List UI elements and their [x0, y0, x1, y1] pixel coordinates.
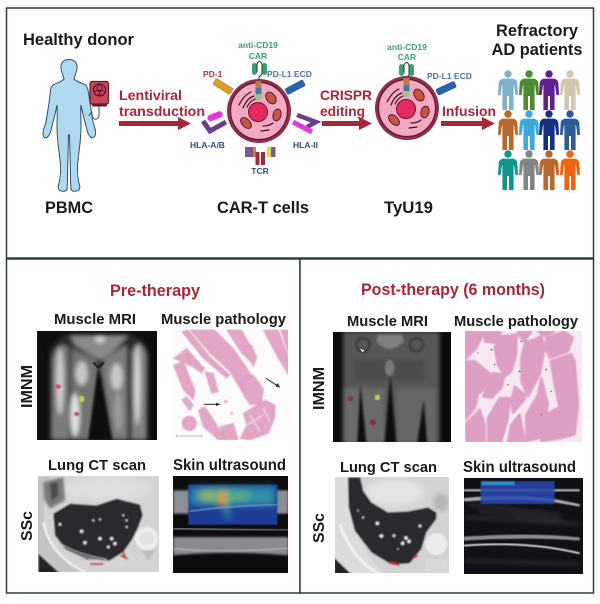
label: muscle MRI pre: Muscle MRI [54, 312, 136, 328]
label: lung CT post: Lung CT scan [340, 460, 437, 476]
icon: PD-L1 ECD [436, 81, 457, 95]
label: SSc pre: SSc [19, 511, 36, 541]
heading: pre-therapy: Pre-therapy [110, 282, 200, 300]
label: anti-CD19 CAR: anti-CD19 [387, 42, 427, 52]
label: CRISPR editing: editing [320, 104, 365, 119]
panel: pre-therapy [6, 259, 300, 593]
label: lung CT pre: Lung CT scan [48, 458, 146, 474]
image: pre-therapy muscle pathology [170, 328, 290, 442]
panel: workflow [6, 8, 594, 258]
arrow: CRISPR editing [322, 117, 372, 130]
label: anti-CD19 CAR: CAR [249, 51, 267, 61]
TyU19 cell diagram [375, 42, 472, 140]
arrow: infusion [441, 117, 495, 130]
label: infusion: Infusion [442, 103, 496, 119]
label: PD-L1 ECD: PD-L1 ECD [427, 71, 472, 81]
label: skin ultrasound pre: Skin ultrasound [173, 457, 286, 474]
heading: healthy donor: Healthy donor [23, 31, 135, 49]
image: pre-therapy skin ultrasound [172, 475, 292, 574]
heading: refractory AD patients: AD patients [492, 41, 582, 59]
icon: HLA-II molecule [293, 115, 316, 132]
label: muscle pathology pre: Muscle pathology [161, 312, 287, 328]
icon: CAR receptor [252, 62, 267, 80]
label: SSc post: SSc [311, 513, 328, 543]
label: muscle MRI post: Muscle MRI [347, 314, 428, 330]
label: TyU19: TyU19 [384, 199, 433, 217]
label: PBMC: PBMC [45, 199, 93, 217]
label: HLA-II: HLA-II [293, 140, 318, 150]
label: PD-L1 ECD: PD-L1 ECD [267, 69, 312, 79]
arrow: lentiviral transduction [119, 117, 191, 130]
label: skin ultrasound post: Skin ultrasound [463, 459, 576, 476]
label: IMNM pre: IMNM [19, 365, 36, 408]
image: pre-therapy muscle MRI [37, 331, 157, 440]
icon: infusion pump [89, 82, 108, 119]
label: CRISPR editing: CRISPR [320, 88, 372, 103]
panel: post-therapy [300, 259, 594, 593]
label: anti-CD19 CAR: CAR [398, 52, 416, 62]
label: PD-1: PD-1 [203, 69, 223, 79]
image: post-therapy muscle MRI [331, 331, 453, 445]
icon: CAR-T cell [227, 79, 291, 143]
heading: refractory AD patients: Refractory [496, 22, 579, 40]
label: CAR-T cells: CAR-T cells [217, 199, 309, 217]
icon: HLA-A/B molecule [203, 110, 226, 131]
icon: CAR receptor [399, 62, 414, 81]
label: anti-CD19 CAR: anti-CD19 [238, 40, 278, 50]
icon: TyU19 cell [375, 76, 439, 140]
icon group: patients [498, 70, 580, 190]
icon: TCR [245, 147, 276, 165]
label: TCR: TCR [251, 166, 269, 176]
label: lentiviral transduction: transduction [119, 104, 205, 120]
image: post-therapy skin ultrasound [461, 476, 586, 576]
icon: PD-L1 ECD [285, 80, 305, 95]
icon: PD-1 receptor [213, 78, 233, 95]
label: lentiviral transduction: Lentiviral [119, 88, 182, 104]
heading: post-therapy: Post-therapy (6 months) [361, 281, 545, 299]
CAR-T cell diagram [190, 40, 318, 176]
image: pre-therapy lung CT [37, 475, 160, 574]
label: IMNM post: IMNM [311, 367, 328, 410]
image: post-therapy lung CT [333, 476, 450, 576]
label: muscle pathology post: Muscle pathology [454, 314, 579, 330]
label: HLA-A/B: HLA-A/B [190, 140, 225, 150]
icon: human donor body [43, 60, 96, 191]
image: post-therapy muscle pathology [463, 330, 585, 445]
